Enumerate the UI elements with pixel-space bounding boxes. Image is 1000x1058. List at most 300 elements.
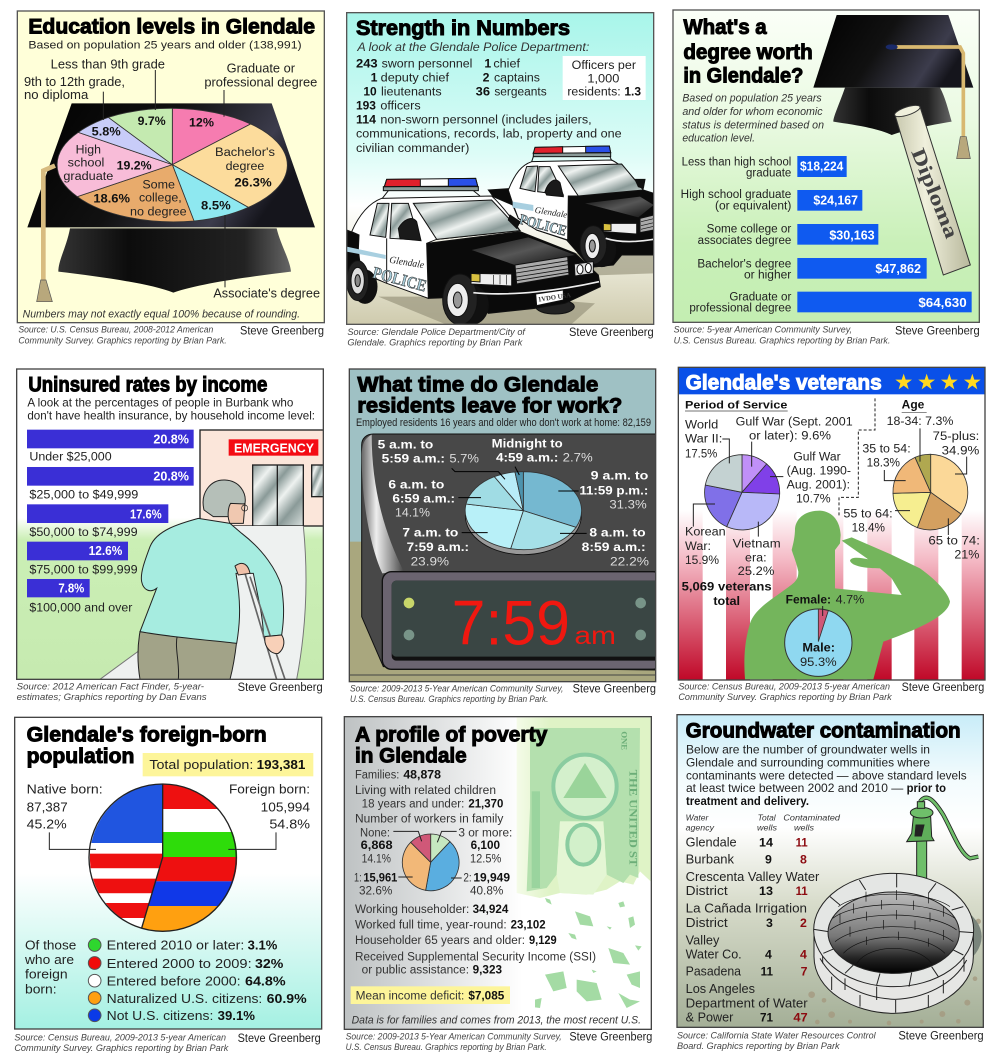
pie labels: education: degree bbox=[226, 159, 264, 173]
text block: family counts: 18 years and under: bbox=[362, 796, 464, 810]
labels: age: 65 to 74: bbox=[928, 533, 980, 547]
icon: graduation cap bbox=[813, 15, 973, 159]
callout: total population: Total population: bbox=[149, 758, 253, 772]
text block: family counts: 21,370 bbox=[468, 796, 503, 810]
table: well counts by agency: La Cañada Irrigation bbox=[686, 901, 807, 915]
table: well counts by agency: Total bbox=[758, 812, 777, 822]
labels: workers pie bbox=[354, 825, 512, 898]
panel: veterans bbox=[678, 367, 985, 702]
legend: foreign-born breakdown: Entered before 2000: bbox=[107, 974, 241, 989]
bar chart: uninsured by income: 7.8% bbox=[58, 582, 84, 596]
panel: uninsured rates bbox=[17, 369, 325, 702]
source credit: Glendale. Graphics reporting by Brian Park bbox=[347, 337, 524, 347]
callout: mean income deficit: $7,085 bbox=[468, 989, 504, 1003]
text block: householder counts: 34,924 bbox=[473, 902, 508, 916]
labels: period of service: Gulf War (Sept. 2001 bbox=[736, 415, 853, 429]
text block: householder counts: Worked full time, year-round: bbox=[355, 918, 507, 932]
text block: family counts: Families: bbox=[355, 768, 399, 782]
intro text: status is determined based on bbox=[682, 119, 824, 131]
text block: personnel counts: communications, records, lab, property and one bbox=[356, 127, 622, 141]
text block: personnel counts: 193 bbox=[356, 99, 376, 113]
table: well counts by agency: 14 bbox=[759, 835, 773, 849]
illustration: torn dollar bill bbox=[517, 717, 651, 1008]
table: well counts by agency: 2 bbox=[800, 916, 807, 930]
legend: foreign-born breakdown: Not U.S. citizens: bbox=[107, 1008, 213, 1023]
total: veterans: 5,069 veterans bbox=[682, 580, 772, 594]
bar chart: income by education bbox=[681, 155, 972, 315]
labels: age: 18-34: 7.3% bbox=[887, 414, 953, 428]
source credit bbox=[17, 680, 323, 702]
chart: gender pie bbox=[785, 592, 864, 676]
icon: diploma: Diploma bbox=[906, 145, 962, 242]
bar chart: income by education: Bachelor's degree bbox=[697, 256, 791, 270]
legend: foreign-born breakdown: 39.1% bbox=[218, 1008, 255, 1023]
text block: family counts: Number of workers in family bbox=[355, 811, 504, 825]
panel: poverty profile bbox=[344, 717, 652, 1052]
chart: age pie bbox=[893, 454, 968, 530]
heading: foreign-born bbox=[27, 723, 267, 768]
label: native born: Native born: bbox=[27, 782, 103, 797]
chart: gender pie: Male: bbox=[802, 641, 835, 655]
text block: personnel counts: 243 bbox=[356, 57, 378, 71]
illustration: rear police car bbox=[488, 146, 655, 277]
source credit: Steve Greenberg bbox=[895, 323, 980, 337]
source credit: Community Survey. Graphics reporting by Brian Park bbox=[14, 1043, 230, 1053]
pie labels: education: graduate bbox=[63, 169, 113, 183]
label: native born: 45.2% bbox=[27, 817, 67, 832]
callouts: outer education labels: Associate's degree bbox=[213, 286, 320, 300]
bar chart: income by education: $47,862 bbox=[875, 262, 921, 276]
pie labels: departure times: Midnight to bbox=[492, 436, 563, 450]
pie labels: departure times: 7 a.m. to bbox=[402, 526, 459, 540]
label: foreign born: 54.8% bbox=[269, 817, 310, 832]
pie labels: departure times: 5:59 a.m.: bbox=[382, 452, 445, 466]
table: well counts by agency: 13 bbox=[759, 884, 773, 898]
bar chart: income by education: $18,224 bbox=[800, 160, 843, 174]
labels: workers pie: 12.5% bbox=[470, 851, 501, 865]
pie labels: education: 26.3% bbox=[234, 176, 272, 190]
labels: age: 35 to 54: bbox=[862, 441, 911, 455]
bar chart: uninsured by income: $25,000 to $49,999 bbox=[29, 487, 138, 501]
text block: householder counts: Received Supplemental Security Income (SSI) bbox=[355, 950, 596, 964]
illustration: rear police car: POLICE bbox=[517, 212, 568, 240]
dashed divider bbox=[839, 398, 875, 517]
intro text: A look at the percentages of people in Burbank who bbox=[27, 397, 293, 410]
legend: foreign-born breakdown: Entered 2010 or later: bbox=[107, 938, 244, 953]
note: rounding: Numbers may not exactly equal 100% because of rounding. bbox=[23, 308, 300, 320]
icons: four stars bbox=[895, 374, 981, 389]
text block: personnel counts: lieutenants bbox=[381, 85, 442, 99]
pie labels: education: 8.5% bbox=[201, 198, 231, 212]
labels: workers pie: 19,949 bbox=[473, 870, 510, 884]
illustration: emergency room bbox=[100, 430, 325, 679]
legend: foreign-born breakdown: Of those bbox=[25, 938, 76, 953]
intro text: Below are the number of groundwater wells in bbox=[686, 743, 930, 756]
heading: poverty profile: A profile of poverty bbox=[355, 723, 548, 746]
panel: education levels bbox=[17, 11, 324, 345]
intro text bbox=[682, 93, 824, 145]
pie labels: departure times: 6:59 a.m.: bbox=[392, 492, 455, 506]
illustration: front police car bbox=[347, 178, 600, 325]
labels: age: 55 to 64: bbox=[843, 506, 893, 520]
labels: workers pie: 15,961 bbox=[363, 870, 397, 884]
heading: what's a degree worth: degree worth bbox=[683, 41, 813, 64]
text block: householder counts: 9,129 bbox=[529, 933, 557, 947]
callouts: outer education labels: professional degree bbox=[204, 76, 317, 90]
heading: what's a degree worth bbox=[683, 16, 813, 88]
labels: workers pie: 1: bbox=[354, 870, 362, 884]
labels: workers pie: 3 or more: bbox=[458, 825, 512, 839]
label: native born: 87,387 bbox=[27, 799, 68, 814]
bar chart: uninsured by income: $50,000 to $74,999 bbox=[29, 525, 138, 539]
table: well counts by agency: Los Angeles bbox=[686, 982, 755, 996]
intro text bbox=[686, 743, 967, 808]
callout: total population: 193,381 bbox=[257, 758, 305, 772]
legend: foreign-born breakdown: born: bbox=[25, 981, 57, 996]
text block: householder counts: or public assistance: bbox=[362, 963, 469, 977]
text block: personnel counts: 2 bbox=[483, 71, 490, 85]
pie labels: education: 12% bbox=[189, 116, 214, 130]
bar chart: income by education: associates degree bbox=[698, 233, 791, 247]
source credit: Steve Greenberg bbox=[898, 1028, 984, 1042]
table: well counts by agency: Contaminated bbox=[783, 812, 841, 822]
labels: period of service bbox=[685, 415, 853, 578]
intro text: treatment and delivery. bbox=[686, 795, 809, 808]
heading: veterans: Glendale's veterans bbox=[686, 371, 882, 394]
intro text: prior to bbox=[907, 782, 946, 795]
intro text: and older for whom economic bbox=[682, 106, 823, 118]
labels: period of service: 25.2% bbox=[738, 564, 774, 578]
bar chart: income by education: $24,167 bbox=[813, 194, 858, 208]
labels: period of service: 10.7% bbox=[796, 492, 831, 506]
bar chart: uninsured by income: 20.8% bbox=[153, 470, 189, 484]
source credit: Source: California State Water Resources Control bbox=[677, 1031, 877, 1041]
pie labels: departure times bbox=[378, 436, 649, 569]
source credit bbox=[350, 682, 656, 704]
text block: personnel counts: 114 bbox=[356, 113, 376, 127]
note: data year: Data is for families and comes from 2013, the most recent U.S. bbox=[352, 1015, 641, 1027]
text block: personnel counts: non-sworn personnel (includes jailers, bbox=[380, 113, 592, 127]
table: well counts by agency: 7 bbox=[801, 965, 808, 979]
legend: foreign-born breakdown: Entered 2000 to 2009: bbox=[107, 956, 252, 971]
text block: family counts: 48,878 bbox=[403, 768, 441, 782]
table: well counts by agency: 4 bbox=[765, 947, 772, 961]
source credit: Steve Greenberg bbox=[238, 680, 323, 694]
source credit: Source: 2009-2013 5-Year American Community Survey, bbox=[346, 1032, 562, 1042]
table: well counts by agency: Department of Water bbox=[686, 996, 808, 1010]
bar chart: income by education: $64,630 bbox=[918, 296, 967, 310]
pie labels: departure times: 2.7% bbox=[563, 451, 593, 465]
subheading: employed residents: Employed residents 16 years and older who don't work at home: 82,159 bbox=[356, 417, 651, 429]
pie labels: education: school bbox=[68, 156, 104, 170]
heading: poverty profile: in Glendale bbox=[355, 744, 467, 767]
subheading: police department: A look at the Glendale Police Department: bbox=[356, 40, 589, 54]
heading: uninsured rates: Uninsured rates by income bbox=[28, 374, 267, 397]
text block: personnel counts: 10 bbox=[363, 85, 377, 99]
illustration: torn dollar bill: ONE bbox=[620, 731, 630, 750]
section heading: age: Age bbox=[902, 397, 924, 411]
label: foreign born bbox=[229, 782, 310, 832]
illustration: alarm clock bbox=[362, 434, 662, 670]
chart: departure time pie bbox=[465, 472, 582, 555]
bar chart: uninsured by income: 17.6% bbox=[130, 507, 162, 521]
labels: age bbox=[843, 414, 980, 561]
bar chart: income by education: Graduate or bbox=[729, 290, 791, 304]
callouts: outer education labels: no diploma bbox=[24, 88, 89, 102]
labels: period of service: War: bbox=[685, 539, 711, 553]
table: well counts by agency: agency bbox=[686, 822, 715, 832]
source credit: Source: Census Bureau, 2009-2013 5-year American bbox=[678, 681, 890, 691]
intro text: Based on population 25 years bbox=[682, 93, 822, 105]
source credit bbox=[678, 680, 984, 702]
bar chart: income by education: (or equivalent) bbox=[715, 198, 791, 212]
labels: age: 18.4% bbox=[852, 521, 885, 535]
text block: personnel counts: sergeants bbox=[494, 85, 547, 99]
callout: total population bbox=[143, 753, 313, 776]
label: foreign born: 105,994 bbox=[261, 799, 310, 814]
pie labels: education: High bbox=[76, 142, 101, 156]
table: well counts by agency: 4 bbox=[800, 947, 807, 961]
labels: age: 21% bbox=[954, 547, 979, 561]
labels: period of service: 15.9% bbox=[685, 553, 719, 567]
heading: education levels: Education levels in Glendale bbox=[28, 15, 315, 38]
source credit: Community Survey. Graphics reporting by Brian Park. bbox=[18, 335, 227, 345]
chart: period of service pie bbox=[705, 455, 780, 530]
legend: foreign-born breakdown: who are bbox=[24, 952, 74, 967]
pie labels: departure times: 22.2% bbox=[610, 555, 649, 569]
table: well counts by agency: Water bbox=[686, 812, 709, 822]
intro text: don't have health insurance, by household income level: bbox=[27, 409, 315, 422]
source credit: Steve Greenberg bbox=[569, 325, 654, 339]
total: veterans: total bbox=[713, 594, 740, 608]
labels: period of service: Korean bbox=[685, 525, 726, 539]
table: well counts by agency: 3 bbox=[766, 916, 773, 930]
table: well counts by agency: wells bbox=[794, 822, 815, 832]
section heading: period of service: Period of Service bbox=[685, 399, 787, 411]
callout: mean income deficit: Mean income deficit: bbox=[356, 989, 464, 1003]
subheading: population basis: Based on population 25 years and older (138,991) bbox=[28, 39, 302, 51]
labels: period of service: 17.5% bbox=[685, 446, 717, 460]
pie labels: departure times: 7:59 a.m.: bbox=[407, 540, 469, 554]
table: well counts by agency: Crescenta Valley Water bbox=[686, 870, 819, 884]
callouts: outer education labels bbox=[24, 57, 320, 300]
pie labels: education: no degree bbox=[130, 205, 187, 219]
illustration: alarm clock: am bbox=[574, 622, 616, 650]
illustration: stone well bbox=[808, 873, 982, 1025]
panel: foreign-born population bbox=[14, 717, 322, 1053]
text block: personnel counts: 36 bbox=[476, 85, 490, 99]
bar chart: income by education: graduate bbox=[746, 166, 791, 180]
callout: officers per 1,000 residents: Officers per bbox=[572, 58, 636, 72]
pie labels: education: 5.8% bbox=[92, 125, 121, 139]
labels: workers pie: 6,868 bbox=[361, 838, 393, 852]
labels: period of service: (Aug. 1990- bbox=[787, 464, 851, 478]
panel: leaving for work bbox=[349, 369, 662, 704]
table: well counts by agency: Pasadena bbox=[686, 965, 742, 979]
bar chart: income by education: Less than high school bbox=[682, 155, 791, 169]
source credit: Source: Census Bureau, 2009-2013 5-year American bbox=[14, 1033, 226, 1043]
illustration: front police car: 1VDO USA bbox=[538, 292, 572, 304]
pie labels: departure times: 4:59 a.m.: bbox=[496, 451, 558, 465]
pie labels: education: 9.7% bbox=[138, 114, 166, 128]
header band bbox=[678, 367, 985, 394]
text block: family counts bbox=[355, 768, 504, 825]
label: foreign born: Foreign born: bbox=[229, 782, 310, 797]
heading: foreign-born: population bbox=[27, 745, 134, 768]
source credit bbox=[14, 1031, 321, 1053]
source credit: Source: Glendale Police Department/City of bbox=[347, 327, 526, 337]
legend: foreign-born breakdown: 60.9% bbox=[267, 991, 307, 1006]
callouts: outer education labels: Less than 9th grade bbox=[51, 57, 165, 71]
text block: family counts: Living with related children bbox=[355, 783, 496, 797]
text block: personnel counts bbox=[356, 57, 622, 155]
labels: period of service: War II: bbox=[685, 432, 722, 446]
source credit: estimates; Graphics reporting by Dan Evans bbox=[17, 692, 207, 702]
source credit bbox=[674, 323, 980, 345]
pie labels: departure times: 5.7% bbox=[449, 452, 479, 466]
table: well counts by agency: Valley bbox=[686, 933, 720, 947]
text block: personnel counts: deputy chief bbox=[381, 71, 450, 85]
chart: gender pie: Female: bbox=[786, 592, 831, 606]
callout: mean income deficit bbox=[351, 986, 510, 1004]
icon: graduation cap bbox=[27, 103, 315, 302]
text block: personnel counts: 1 bbox=[371, 71, 378, 85]
labels: workers pie: 32.6% bbox=[359, 884, 392, 898]
illustration: man on crutch bbox=[138, 480, 285, 679]
source credit: Community Survey. Graphics reporting by Brian Park bbox=[678, 692, 893, 702]
labels: workers pie: 2: bbox=[463, 870, 472, 884]
table: well counts by agency: Glendale bbox=[686, 835, 737, 849]
legend: foreign-born breakdown: foreign bbox=[25, 967, 68, 982]
leader lines bbox=[452, 467, 587, 533]
pie labels: education: 18.6% bbox=[93, 192, 130, 206]
source credit: Steve Greenberg bbox=[573, 682, 656, 696]
table: well counts by agency: 8 bbox=[800, 853, 807, 867]
bar chart: income by education: High school graduate bbox=[681, 187, 791, 201]
source credit bbox=[346, 1030, 652, 1052]
heading: groundwater: Groundwater contamination bbox=[686, 719, 961, 742]
bar chart: uninsured by income bbox=[27, 430, 194, 615]
source credit bbox=[347, 325, 654, 347]
bar chart: income by education: $30,163 bbox=[829, 228, 875, 242]
labels: period of service: era: bbox=[745, 550, 767, 564]
intro text: contaminants were detected — above standard levels bbox=[686, 769, 967, 782]
source credit: U.S. Census Bureau. Graphics reporting by Brian Park. bbox=[674, 335, 890, 345]
heading: what time bbox=[357, 374, 622, 417]
source credit: U.S. Census Bureau. Graphics reporting by Brian Park. bbox=[346, 1042, 547, 1052]
labels: age: 18.3% bbox=[867, 456, 900, 470]
chart: workers pie bbox=[402, 834, 459, 891]
table: well counts by agency: District bbox=[686, 884, 728, 898]
labels: workers pie: None: bbox=[360, 825, 390, 839]
chart: gender pie: 95.3% bbox=[800, 655, 837, 669]
heading: strength in numbers: Strength in Numbers bbox=[356, 17, 570, 40]
callout: officers per 1,000 residents bbox=[563, 56, 646, 100]
icon: saluting soldier silhouette bbox=[744, 511, 950, 679]
table: well counts by agency: & Power bbox=[686, 1010, 733, 1024]
bar chart: income by education: professional degree bbox=[689, 301, 791, 315]
bar chart: uninsured by income: $100,000 and over bbox=[29, 601, 132, 615]
intro text: Glendale and surrounding communities where bbox=[686, 756, 930, 769]
source credit: Board. Graphics reporting by Brian Park bbox=[677, 1041, 841, 1051]
legend: foreign-born breakdown: 32% bbox=[255, 956, 284, 971]
source credit bbox=[18, 323, 324, 345]
source credit: Source: U.S. Census Bureau, 2008-2012 American bbox=[18, 325, 213, 335]
source credit: U.S. Census Bureau. Graphics reporting by Brian Park. bbox=[350, 694, 548, 704]
panel: police strength bbox=[347, 13, 655, 347]
heading: what time: What time do Glendale bbox=[357, 374, 598, 397]
pie labels: departure times: 6 a.m. to bbox=[388, 477, 445, 491]
text block: personnel counts: officers bbox=[380, 99, 421, 113]
table: well counts by agency: 11 bbox=[796, 884, 808, 898]
intro text: at least twice between 2002 and 2010 — bbox=[686, 782, 904, 795]
text block: householder counts: 23,102 bbox=[511, 918, 546, 932]
heading: what's a degree worth: in Glendale? bbox=[683, 65, 803, 88]
text block: personnel counts: 1 bbox=[484, 57, 491, 71]
illustration: torn dollar bill: THE UNITED ST bbox=[626, 770, 638, 867]
text block: householder counts bbox=[355, 902, 596, 977]
legend: foreign-born breakdown bbox=[24, 938, 307, 1023]
source credit: Steve Greenberg bbox=[569, 1030, 652, 1044]
labels: age: 34.9% bbox=[942, 443, 979, 457]
labels: workers pie: 14.1% bbox=[362, 851, 391, 865]
table: well counts by agency: 71 bbox=[760, 1010, 773, 1024]
intro text bbox=[27, 397, 315, 422]
bar chart: uninsured by income: Under $25,000 bbox=[29, 450, 112, 464]
label: native born bbox=[27, 782, 103, 832]
intro text: education level. bbox=[682, 133, 755, 145]
legend: foreign-born breakdown: 3.1% bbox=[248, 938, 278, 953]
icon: diploma bbox=[893, 103, 970, 275]
pie labels: education: college, bbox=[139, 191, 182, 205]
pie labels: departure times: 23.9% bbox=[411, 555, 449, 569]
illustration: emergency room: EMERGENCY bbox=[234, 441, 315, 455]
pie labels: departure times: 8 a.m. to bbox=[589, 526, 646, 540]
illustration: front police car: POLICE bbox=[371, 263, 429, 295]
text block: personnel counts: chief bbox=[493, 57, 521, 71]
labels: period of service: Gulf War bbox=[793, 450, 841, 464]
table: well counts by agency: wells bbox=[757, 822, 778, 832]
source credit: Source: 2009-2013 5-Year American Community Survey, bbox=[350, 684, 563, 694]
source credit: Steve Greenberg bbox=[238, 1031, 321, 1045]
text block: personnel counts: civilian commander) bbox=[356, 141, 469, 155]
source credit: Source: 2012 American Fact Finder, 5-year- bbox=[17, 681, 204, 691]
callout: officers per 1,000 residents: 1.3 bbox=[624, 85, 641, 99]
labels: period of service: World bbox=[685, 417, 718, 431]
bar chart: income by education: Some college or bbox=[707, 222, 791, 236]
legend: foreign-born breakdown: 64.8% bbox=[245, 974, 286, 989]
heading: what time: residents leave for work? bbox=[357, 394, 622, 417]
total: veterans bbox=[682, 580, 772, 608]
table: well counts by agency: Water Co. bbox=[686, 947, 742, 961]
table: well counts by agency: 47 bbox=[793, 1010, 808, 1024]
labels: workers pie: 40.8% bbox=[470, 884, 503, 898]
illustration: rear police car: Glendale bbox=[534, 205, 568, 220]
chart: gender pie: 4.7% bbox=[836, 592, 864, 606]
legend: foreign-born breakdown: Naturalized U.S. citizens: bbox=[107, 991, 262, 1006]
text block: personnel counts: captains bbox=[494, 71, 540, 85]
pie labels: departure times: 5 a.m. to bbox=[378, 437, 434, 451]
pie labels: departure times: 14.1% bbox=[395, 506, 430, 520]
callouts: outer education labels: Graduate or bbox=[227, 62, 295, 76]
source credit: Source: 5-year American Community Survey, bbox=[674, 325, 852, 335]
bar chart: income by education: or higher bbox=[744, 267, 791, 281]
chart: population pie bbox=[49, 784, 276, 931]
panel: degree worth bbox=[673, 10, 980, 345]
table: well counts by agency: 11 bbox=[761, 965, 773, 979]
bar chart: uninsured by income: 20.8% bbox=[153, 432, 189, 446]
text block: personnel counts: sworn personnel bbox=[382, 57, 472, 71]
